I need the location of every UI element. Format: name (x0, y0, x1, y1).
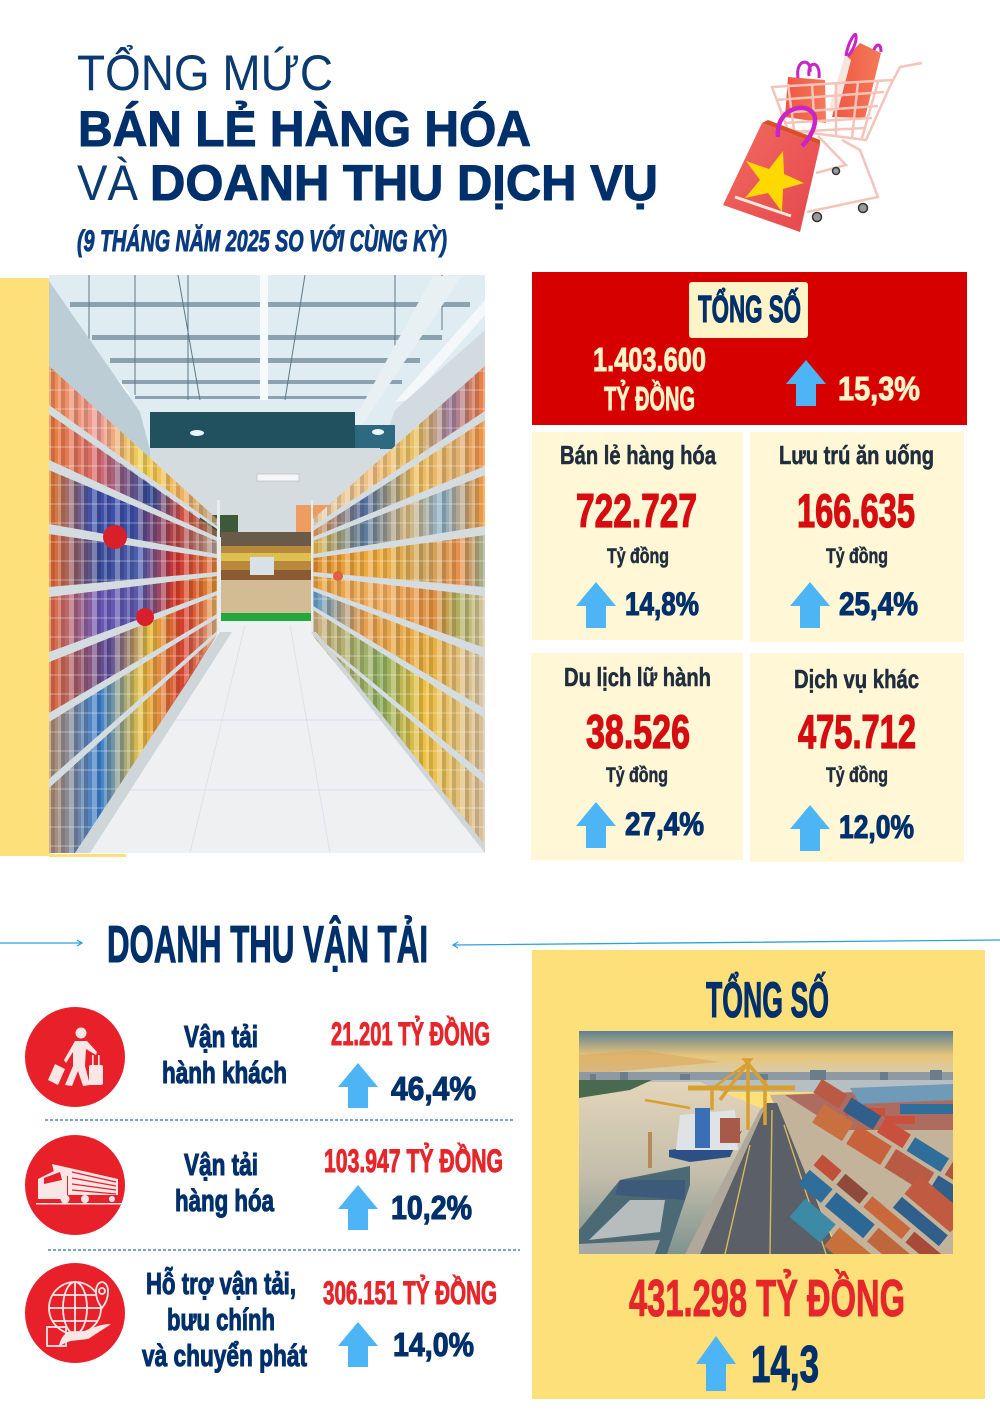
card: dịch vụ khác: Tỷ đồng (826, 764, 888, 787)
title line: VÀ: VÀ (77, 155, 139, 211)
row: hỗ trợ vận tải: 306.151 TỶ ĐỒNG (323, 1275, 497, 1311)
arrow up (576, 582, 616, 628)
back wall (150, 412, 355, 448)
row: vận tải hành khách: hành khách (162, 1055, 287, 1090)
front bag with star (723, 108, 820, 232)
icon: shopping cart with bags (723, 34, 922, 232)
total label badge: TỔNG SỐ (698, 286, 801, 331)
arrow up (338, 1322, 378, 1367)
arrow up (696, 1336, 736, 1391)
ship blue (669, 1130, 742, 1162)
panel: total retail and services (532, 272, 967, 425)
row: vận tải hàng hóa: 103.947 TỶ ĐỒNG (324, 1143, 503, 1179)
middle bag (785, 62, 826, 123)
total value: TỶ ĐỒNG (604, 380, 695, 417)
row: vận tải hành khách (25, 1007, 490, 1108)
card: dịch vụ khác: Dịch vụ khác (794, 664, 919, 694)
title line: BÁN LẺ HÀNG HÓA: BÁN LẺ HÀNG HÓA (78, 101, 531, 157)
card: du lịch lữ hành: 38.526 (586, 705, 690, 758)
card: du lịch lữ hành (531, 653, 743, 860)
row: hỗ trợ vận tải (25, 1263, 497, 1373)
card: bán lẻ hàng hóa: Tỷ đồng (607, 545, 669, 568)
icon: truck (25, 1135, 125, 1235)
title (77, 44, 658, 211)
row: hỗ trợ vận tải: bưu chính (167, 1302, 275, 1337)
card: lưu trú ăn uống: Lưu trú ăn uống (779, 440, 934, 470)
arrow up (576, 802, 616, 848)
right shelves (311, 366, 485, 853)
divider arrow right (453, 940, 1000, 948)
card: lưu trú ăn uống: 166.635 (797, 484, 915, 537)
divider arrow left (0, 940, 82, 946)
yellow accent panel behind photo (0, 278, 126, 857)
transport total growth: 14,3 (751, 1336, 819, 1394)
back display (200, 505, 330, 621)
containers (785, 1079, 953, 1254)
card: du lịch lữ hành: Du lịch lữ hành (564, 662, 711, 692)
floor (75, 620, 485, 853)
card: bán lẻ hàng hóa: Bán lẻ hàng hóa (560, 440, 716, 470)
card: du lịch lữ hành: 27,4% (625, 806, 704, 842)
title line: TỔNG MỨC: TỔNG MỨC (77, 44, 333, 101)
card: du lịch lữ hành: Tỷ đồng (606, 764, 668, 787)
row: vận tải hàng hóa (25, 1135, 503, 1235)
card: dịch vụ khác (750, 653, 964, 862)
card: bán lẻ hàng hóa: 722.727 (576, 484, 697, 537)
arrow up (338, 1185, 378, 1230)
total value: 1.403.600 (593, 341, 706, 378)
arrow up (790, 582, 830, 628)
row: vận tải hàng hóa: 10,2% (391, 1189, 472, 1226)
card: lưu trú ăn uống: Tỷ đồng (826, 545, 888, 568)
card: dịch vụ khác: 12,0% (839, 809, 914, 845)
row: hỗ trợ vận tải: và chuyển phát (142, 1338, 307, 1373)
arrow up (338, 1063, 378, 1108)
row: vận tải hành khách: 46,4% (391, 1070, 476, 1107)
card: bán lẻ hàng hóa: 14,8% (625, 586, 699, 622)
card: dịch vụ khác: 475.712 (798, 705, 916, 758)
row: hỗ trợ vận tải: Hỗ trợ vận tải, (146, 1266, 296, 1301)
card: bán lẻ hàng hóa (532, 432, 743, 640)
gantry crane (645, 1060, 795, 1130)
total label badge (689, 282, 808, 338)
arrow up (786, 360, 826, 406)
total value (593, 341, 706, 417)
row: vận tải hành khách: 21.201 TỶ ĐỒNG (331, 1016, 490, 1052)
subtitle: (9 THÁNG NĂM 2025 SO VỚI CÙNG KỲ) (77, 224, 447, 258)
heading: tổng số: TỔNG SỐ (706, 971, 829, 1028)
ceiling beams (70, 275, 485, 425)
arrow up (790, 805, 830, 851)
ship bottom (579, 1166, 690, 1254)
panel: transport total (532, 950, 987, 1399)
icon: traveler with suitcases (25, 1007, 125, 1107)
left shelves (49, 366, 232, 853)
cart frame (772, 63, 922, 222)
row: hỗ trợ vận tải: 14,0% (393, 1326, 474, 1363)
back bag (828, 34, 881, 118)
row: vận tải hàng hóa: hàng hóa (175, 1183, 275, 1218)
icon: globe with hand and package (25, 1263, 125, 1363)
title line: DOANH THU DỊCH VỤ: DOANH THU DỊCH VỤ (150, 155, 658, 211)
total growth: 15,3% (838, 370, 920, 407)
section heading: doanh thu vận tải: DOANH THU VẬN TẢI (107, 915, 428, 974)
red total box (532, 272, 967, 425)
row: vận tải hành khách: Vận tải (184, 1019, 258, 1054)
row: vận tải hàng hóa: Vận tải (184, 1147, 258, 1182)
card: lưu trú ăn uống (750, 432, 964, 642)
port photo (579, 1031, 953, 1254)
card: lưu trú ăn uống: 25,4% (839, 586, 918, 622)
supermarket aisle photo (49, 275, 485, 853)
